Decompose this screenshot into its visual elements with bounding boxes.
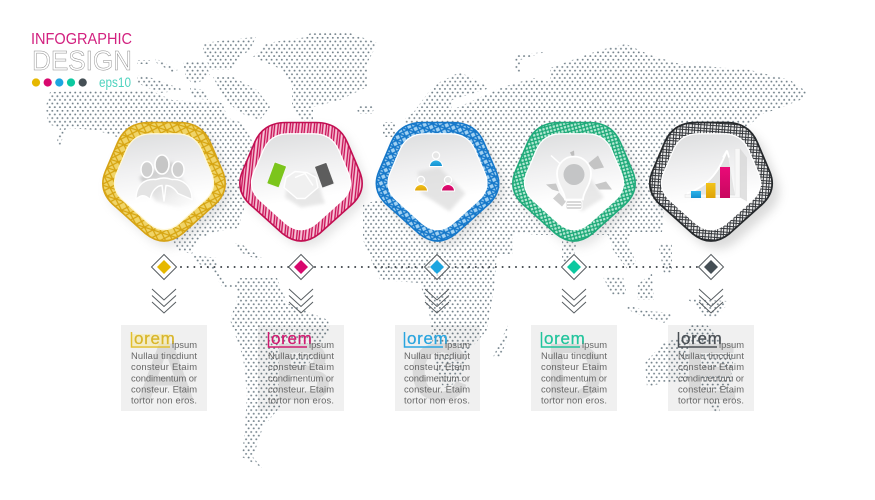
icon: people	[136, 155, 198, 208]
text panel 4: ipsum	[582, 339, 607, 350]
text panel 2: orem	[271, 329, 313, 348]
text panel 1: consteur Etaim	[131, 361, 197, 372]
heading: infographic: INFOGRAPHIC	[31, 31, 132, 48]
text panel 3: tortor non eros.	[404, 394, 470, 406]
text panel 5	[668, 325, 754, 418]
colour dots	[32, 78, 87, 87]
text panel 2	[258, 325, 344, 418]
text panel 4: Nullau tincdiunt	[541, 350, 607, 361]
text panel 5: tortor non eros.	[678, 394, 744, 406]
step 4: green pentagon	[513, 122, 640, 247]
icon: light bulb	[546, 150, 612, 212]
text panel 3: Nullau tincdiunt	[404, 350, 470, 361]
text panel 3: consteur. Etaim	[404, 384, 470, 394]
text panel 2: tortor non eros.	[268, 394, 334, 406]
text panel 3: C	[409, 327, 469, 418]
text panel 3: consteur Etaim	[404, 361, 470, 372]
marker 3	[424, 254, 450, 280]
icon: handshake	[267, 162, 334, 208]
text panel 5: Nullau tincdiunt	[678, 350, 744, 361]
icon: network of people	[414, 152, 466, 212]
text panel 4: orem	[544, 329, 586, 348]
marker 5	[698, 254, 724, 280]
text panel 1	[121, 325, 207, 418]
text panel 2: ipsum	[309, 339, 334, 350]
text panel 5: E	[684, 327, 738, 418]
text panel 4: condimentum or	[541, 372, 607, 384]
eps label: eps10	[99, 75, 131, 90]
world map dots	[46, 33, 806, 468]
step 1: gold pentagon	[103, 122, 230, 247]
text panel 4: consteur. Etaim	[541, 384, 607, 394]
text panel 2: consteur. Etaim	[268, 384, 334, 394]
chevrons 1	[152, 289, 176, 313]
title block	[31, 31, 132, 90]
step 5: black pentagon	[650, 122, 779, 249]
text panel 4: consteur Etaim	[541, 361, 607, 372]
text panel 1: ipsum	[172, 339, 197, 350]
text panel 2: condimentum or	[268, 372, 334, 384]
text panel 1: orem	[134, 329, 176, 348]
text panel 3	[395, 325, 480, 418]
chevrons 2	[289, 289, 313, 313]
chevrons 3	[425, 289, 449, 313]
text panel 5: consteur Etaim	[678, 361, 744, 372]
text panel 1: condimentum or	[131, 372, 197, 384]
text panel 1: A	[136, 327, 196, 418]
text panel 1: tortor non eros.	[131, 394, 197, 406]
text panel 2: B	[273, 327, 333, 418]
text panel 5: orem	[681, 329, 723, 348]
text panel 4: tortor non eros.	[541, 394, 607, 406]
text panel 1: Nullau tincdiunt	[131, 350, 197, 361]
text panel 3: ipsum	[445, 339, 470, 350]
text panel 3: condimentum or	[404, 372, 470, 384]
text panel 5: ipsum	[719, 339, 744, 350]
marker 4	[562, 254, 586, 280]
timeline dotted line	[181, 266, 700, 268]
icon: bar chart	[685, 148, 747, 202]
text panel 5: consteur. Etaim	[678, 384, 744, 394]
chevrons 4	[562, 289, 586, 313]
marker 2	[288, 254, 314, 280]
text panel 3: orem	[407, 329, 449, 348]
chevrons 5	[699, 289, 723, 313]
text panel 2: consteur Etaim	[268, 361, 334, 372]
text panel 4: D	[545, 327, 605, 418]
text panel 4	[531, 325, 617, 418]
step 3: blue pentagon	[376, 122, 504, 247]
text panel 5: condimentum or	[678, 372, 744, 384]
step 2: crimson pentagon	[240, 122, 367, 247]
heading: design: DESIGN	[32, 45, 132, 76]
text panel 1: consteur. Etaim	[131, 384, 197, 394]
text panel 2: Nullau tincdiunt	[268, 350, 334, 361]
marker 1	[152, 254, 176, 280]
